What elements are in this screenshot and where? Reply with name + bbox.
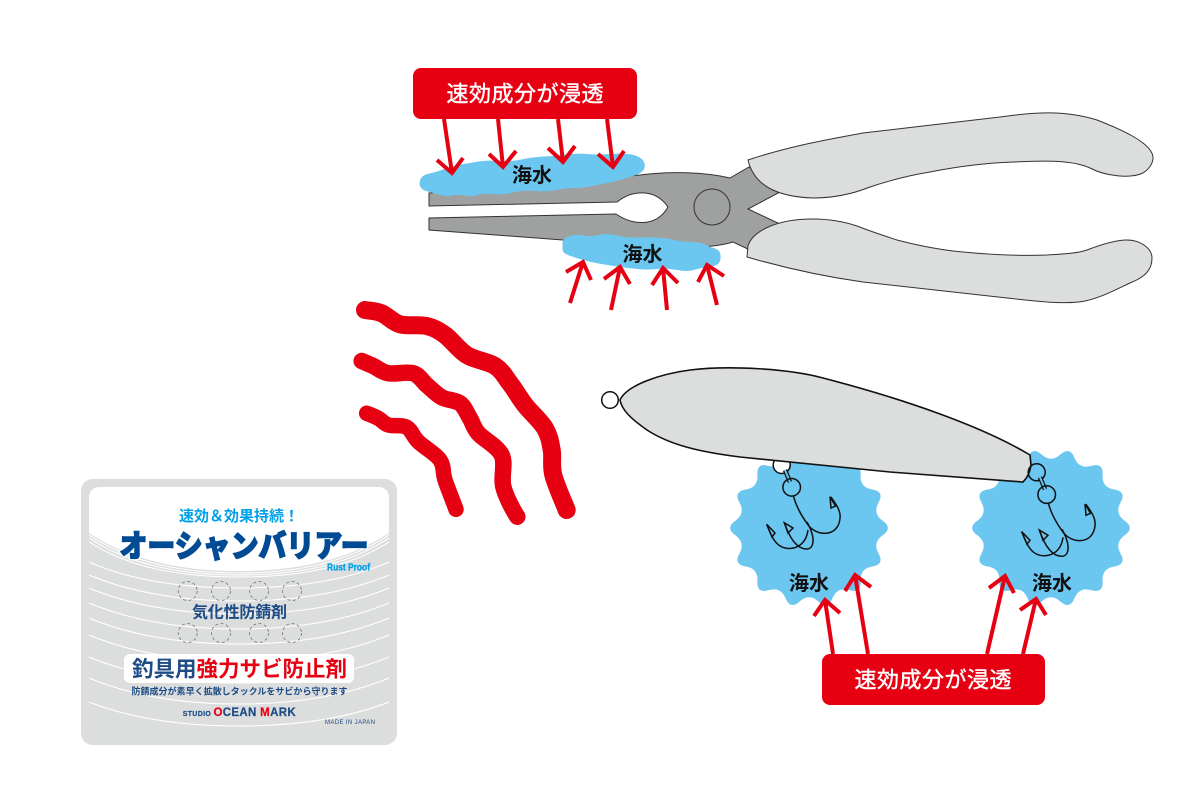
lure eye ring: [602, 392, 618, 408]
panel: pliers with sea water: [420, 113, 1153, 303]
sea water label lure left: 海水: [789, 572, 829, 595]
sea water burst right: [972, 451, 1130, 605]
card white header and flowing lines: [89, 487, 389, 726]
label: penetrates callout top: 速効成分が浸透: [446, 82, 604, 106]
arrows: upward into lower water: [566, 262, 724, 310]
card brand: STUDIO OCEAN MARK: [183, 707, 296, 719]
arrows: downward into upper water: [437, 119, 624, 173]
pliers pivot: [694, 189, 730, 225]
card origin: MADE IN JAPAN: [325, 720, 375, 726]
arrows: up into lure water: [814, 575, 1046, 654]
card description: 防錆成分が素早く拡散しタックルをサビから守ります: [132, 686, 348, 696]
card tagline: 速効＆効果持続！: [179, 508, 299, 525]
sea water lower blob: [562, 234, 721, 271]
sea water label upper: 海水: [512, 164, 552, 187]
infographic illustration: [81, 68, 1154, 745]
icon: treble hook right: [1022, 464, 1095, 556]
sea water burst left: [730, 451, 888, 605]
panel: product label card: [81, 479, 397, 745]
card rust proof: Rust Proof: [327, 562, 371, 574]
card main claim: 釣具用強力サビ防止剤: [132, 658, 347, 682]
pliers metal body: [429, 167, 780, 250]
card product name: オーシャンバリアー: [120, 529, 368, 564]
label: penetrates callout bottom: [822, 654, 1045, 705]
icon: treble hook left: [767, 456, 840, 549]
card background: [81, 479, 397, 745]
pliers upper handle: [748, 113, 1153, 198]
sea water label lure right: 海水: [1032, 572, 1072, 595]
sea water upper blob: [420, 154, 645, 196]
sea water label lower: 海水: [622, 243, 662, 266]
card white pill: [124, 654, 354, 683]
pliers lower handle: [747, 219, 1152, 303]
label: penetrates callout bottom: 速効成分が浸透: [854, 668, 1012, 692]
vapor waves: [362, 310, 567, 517]
label: penetrates callout top: [413, 68, 637, 119]
card dashed vapor circles: [178, 582, 302, 642]
lure body: [620, 368, 1031, 482]
card product name: オーシャンバリアー: [120, 529, 368, 564]
card subtitle: 気化性防錆剤: [192, 602, 287, 622]
